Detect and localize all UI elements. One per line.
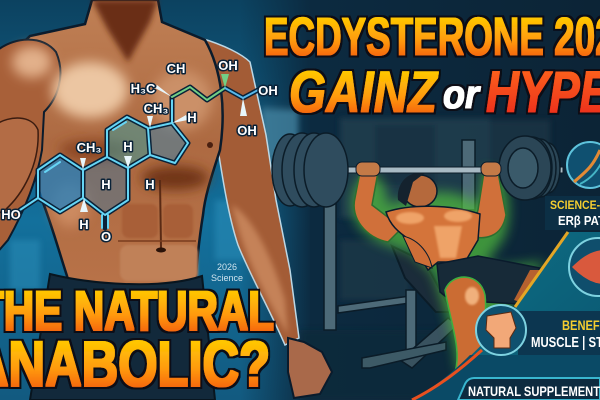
molecule: atom labels: OH (237, 123, 257, 138)
panel: benefits (518, 311, 600, 355)
molecule: atom labels: CH₃ (77, 140, 101, 155)
panel: science (545, 142, 600, 230)
panel: diagonal accent orange (412, 350, 482, 400)
molecule: bonds (20, 97, 188, 228)
molecule: atom labels: OH (218, 58, 238, 73)
panel: natural supplement (458, 378, 600, 400)
barbell: right plates (499, 136, 560, 200)
right panels (412, 142, 600, 400)
lifter: head (403, 175, 437, 207)
panel: lower dark band (412, 355, 600, 400)
figure: neck shadow (92, 0, 158, 62)
molecule: side chain outline (172, 87, 258, 100)
figure: right arm (200, 38, 299, 345)
barbell: left plates (272, 133, 348, 207)
lifter: hands (356, 162, 501, 176)
small caption: 2026 Science: Science (211, 273, 243, 283)
background: left blue lab (0, 0, 310, 400)
lifter: torso (386, 206, 480, 270)
molecule: side chain blue (225, 88, 258, 98)
muscular figure (0, 0, 332, 400)
bench press scene (272, 133, 563, 372)
molecule: atom labels: H (145, 177, 155, 192)
title: GAINZ: GAINZ (289, 60, 439, 125)
molecule: atom labels: CH (167, 61, 185, 76)
figure: torso (5, 0, 223, 285)
molecule: atom labels: H (123, 139, 133, 154)
small caption: 2026 Science: 2026 (217, 262, 237, 272)
rack (324, 140, 475, 352)
molecule: atom labels: H₃C (131, 81, 156, 96)
molecule: atom labels: O (101, 229, 111, 244)
background: right dark gym (240, 0, 600, 400)
molecule: atom labels: OH (258, 83, 278, 98)
figure: abdominal muscles (118, 180, 198, 281)
small caption: 2026 Science (211, 262, 243, 283)
icon: fist badge (476, 305, 526, 355)
gym background shapes (262, 110, 550, 400)
title: or: or (443, 73, 481, 117)
figure: nipple (207, 142, 213, 148)
lifter: knee highlight (465, 287, 479, 305)
molecule: atom labels: H (79, 217, 89, 232)
chemical structure (1, 58, 278, 244)
lifter: shorts (437, 256, 540, 304)
lifter: green aura (352, 170, 545, 372)
panel: diagonal accent gold (515, 232, 568, 307)
molecule: ring fills (38, 117, 188, 215)
molecule: atom labels: H (101, 177, 111, 192)
panel: muscle icon (569, 238, 600, 296)
icon: dna circle (567, 142, 600, 188)
molecule: atom labels: HO (1, 207, 21, 222)
bench (392, 246, 452, 312)
figure: forearm shading (232, 205, 288, 335)
lifter: thigh (403, 236, 432, 268)
lifter: left arm (354, 172, 402, 242)
figure: shorts (30, 274, 215, 400)
molecule: atom labels: H (187, 110, 197, 125)
molecule: atom labels (1, 58, 278, 244)
figure: chest and delt shading (12, 46, 212, 227)
lifter: muscle highlights (396, 210, 472, 258)
molecule: wedges (80, 74, 247, 212)
background: lab panels (10, 105, 300, 290)
molecule: side chain green (172, 87, 225, 100)
molecule: bond outlines (20, 97, 188, 228)
figure: fist (288, 338, 332, 398)
lifter: right arm (470, 172, 506, 238)
figure: left shoulder and arm (0, 40, 60, 255)
panel: diagonal teal background (412, 232, 600, 400)
figure: left forearm (0, 118, 38, 215)
lifter: leg (445, 277, 486, 372)
lifter: far leg (514, 270, 542, 302)
molecule: atom labels: CH₃ (144, 101, 168, 116)
barbell bar (278, 167, 563, 173)
